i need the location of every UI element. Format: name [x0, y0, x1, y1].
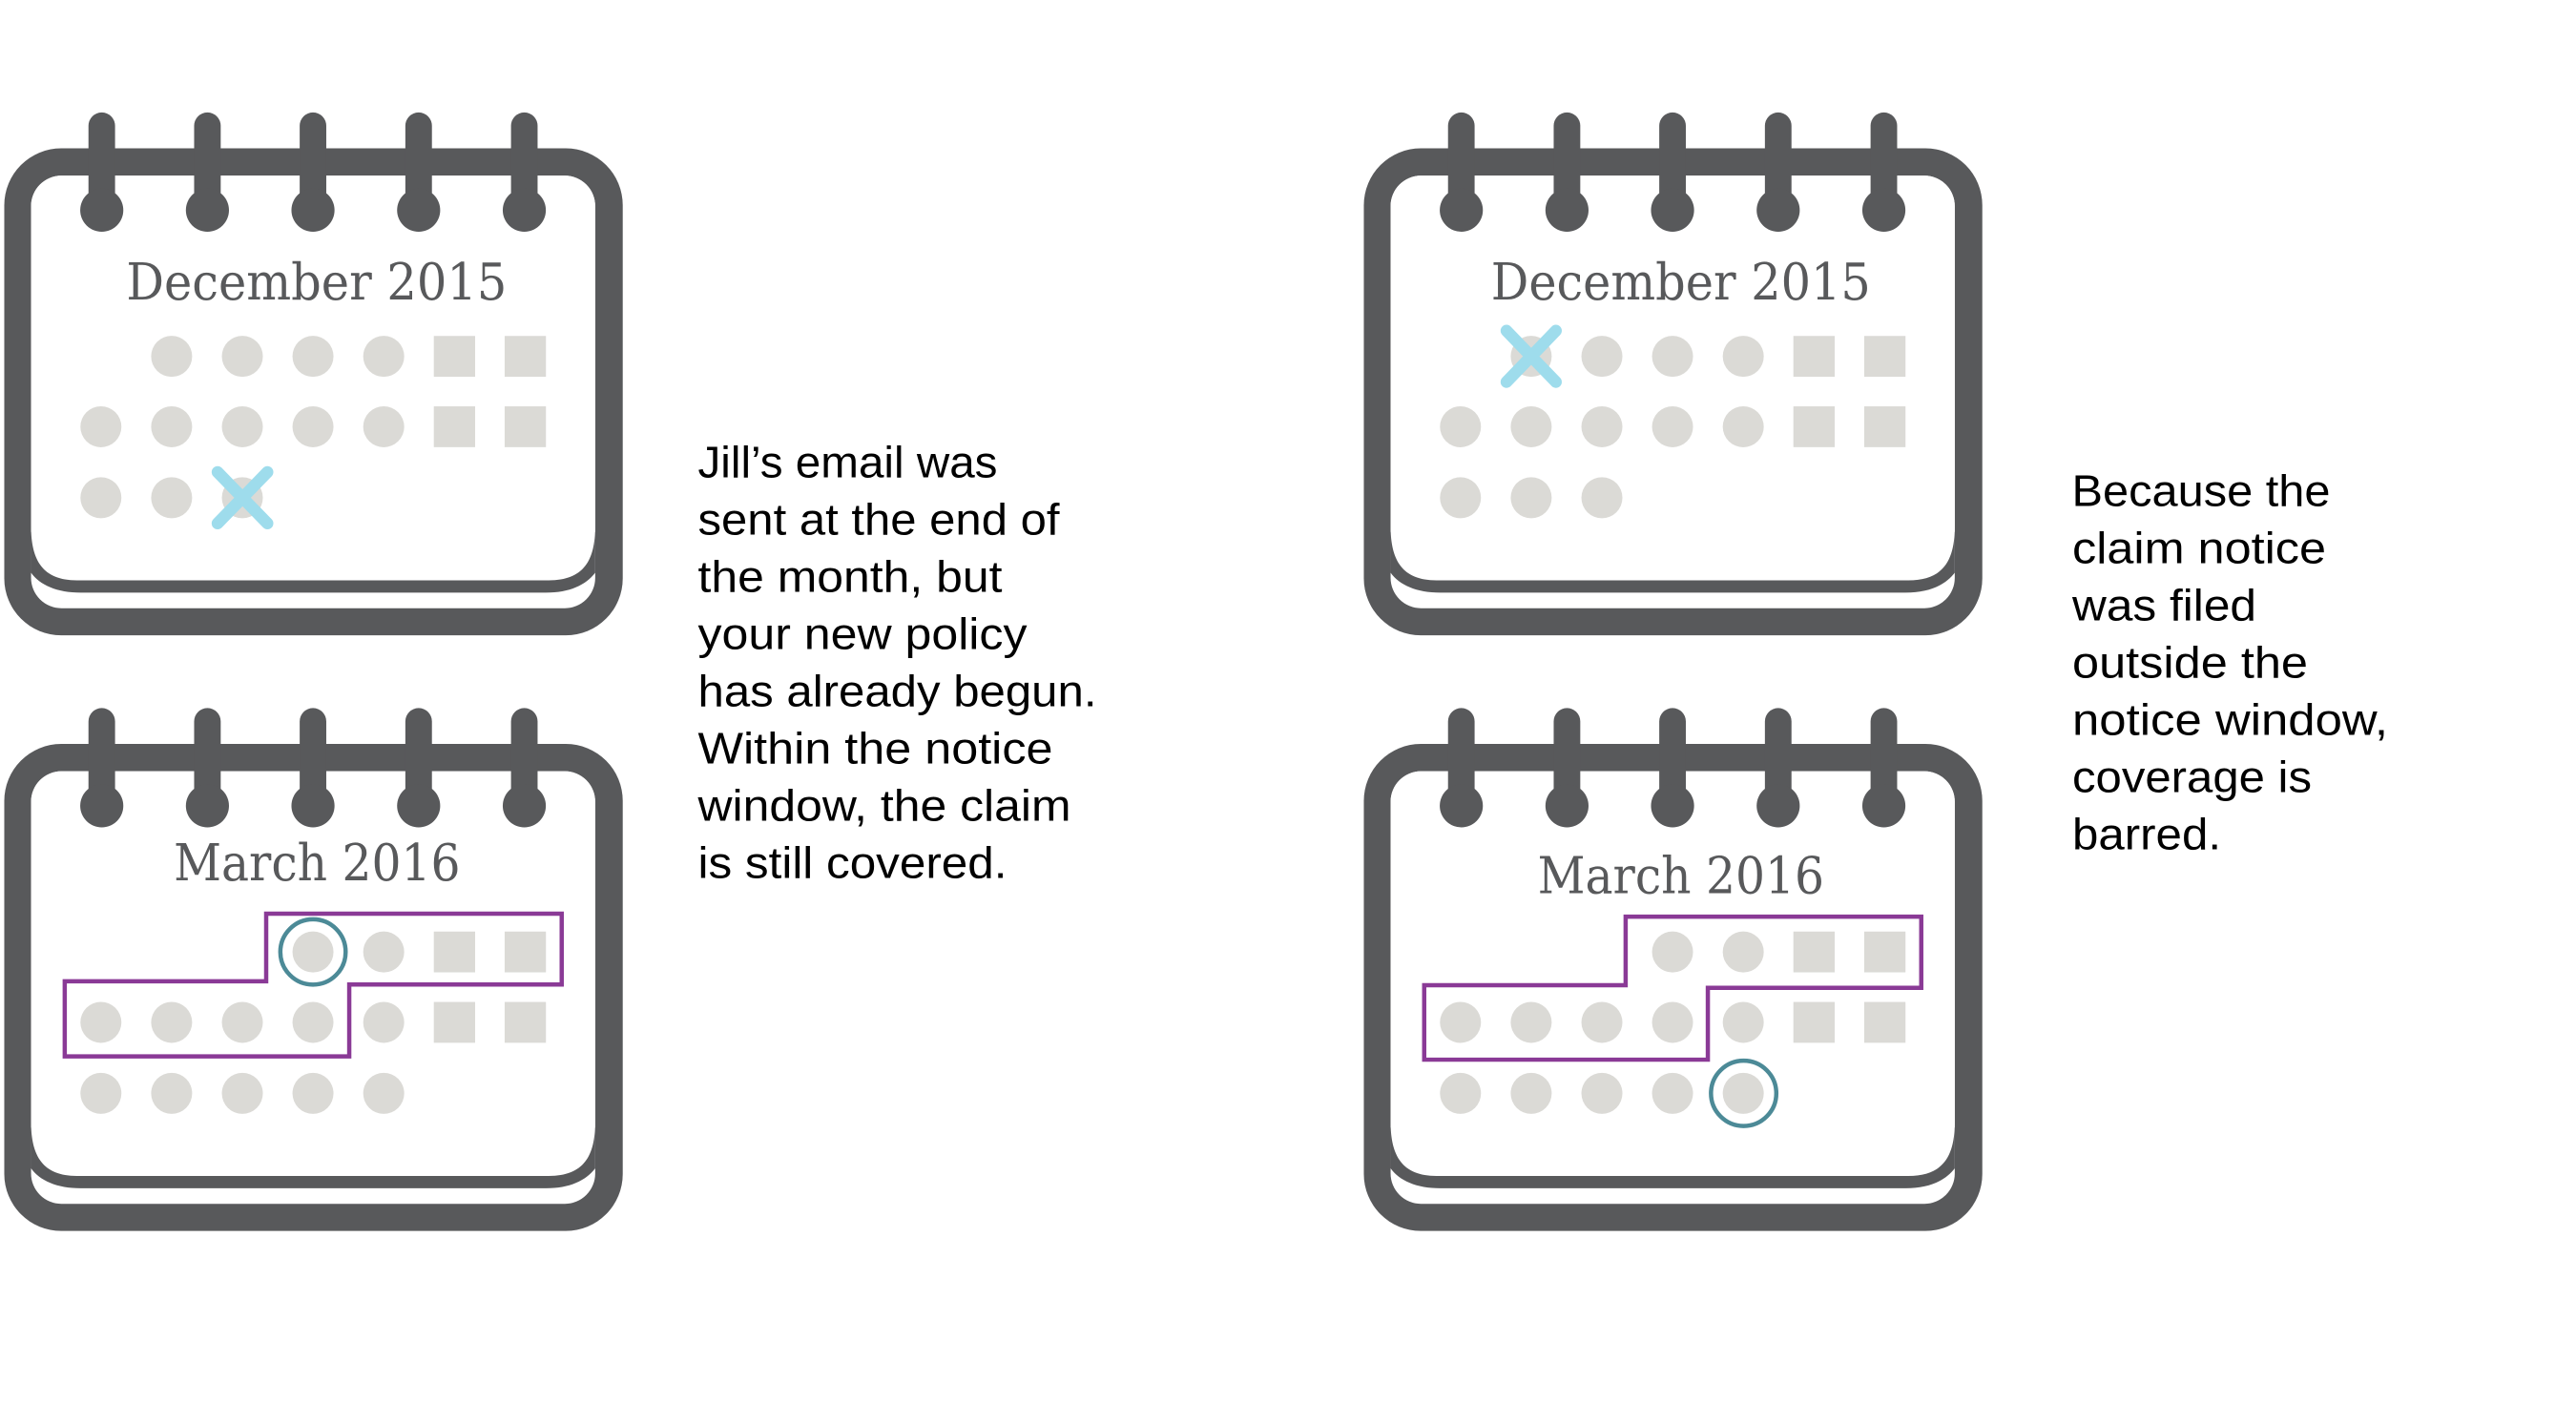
text block: right scenario: Because the [2072, 466, 2330, 516]
day grid [1440, 336, 1905, 518]
text block: left scenario: is still covered. [698, 838, 1008, 888]
text block: left scenario: window, the claim [696, 781, 1070, 831]
month heading: March 2016 [1538, 846, 1824, 906]
teal circle marking claim date [1711, 1061, 1776, 1126]
purple notice window outline [65, 914, 562, 1057]
text block: right scenario: was filed [2071, 581, 2256, 630]
text block: left scenario: your new policy [698, 609, 1027, 659]
icon: blue X marking the day [218, 472, 267, 524]
icon: blue X marking the day [1506, 331, 1556, 381]
calendar frame [1363, 708, 1983, 1231]
day grid [1440, 932, 1905, 1114]
month heading: March 2016 [174, 833, 461, 893]
purple notice window outline [1424, 917, 1922, 1060]
calendar: March 2016, claim outside notice window [1363, 708, 1983, 1231]
calendar: March 2016, claim inside notice window [4, 708, 623, 1231]
month heading: December 2015 [126, 252, 507, 312]
text block: right scenario: coverage is [2072, 753, 2312, 802]
calendar frame [4, 708, 623, 1231]
day grid [80, 932, 546, 1114]
text block: left scenario: Jill’s email was [698, 438, 998, 487]
month heading: December 2015 [1491, 252, 1871, 312]
text block: left scenario: Within the notice [698, 724, 1053, 773]
text block: right scenario: notice window, [2072, 695, 2388, 745]
text block: left scenario: the month, but [698, 552, 1003, 602]
calendar: December 2015, email sent late in month [4, 113, 623, 635]
calendar frame [4, 113, 623, 635]
text block: right scenario: claim notice [2072, 524, 2326, 573]
text block: right scenario: outside the [2072, 638, 2308, 688]
text block: right scenario [2071, 466, 2388, 859]
day grid [80, 336, 546, 518]
text block: left scenario [696, 438, 1097, 888]
text block: left scenario: has already begun. [698, 667, 1097, 716]
calendar: December 2015, event early in month [1363, 113, 1983, 635]
text block: right scenario: barred. [2072, 810, 2221, 859]
teal circle marking claim date [280, 919, 345, 984]
text block: left scenario: sent at the end of [698, 495, 1060, 545]
calendar frame [1363, 113, 1983, 635]
